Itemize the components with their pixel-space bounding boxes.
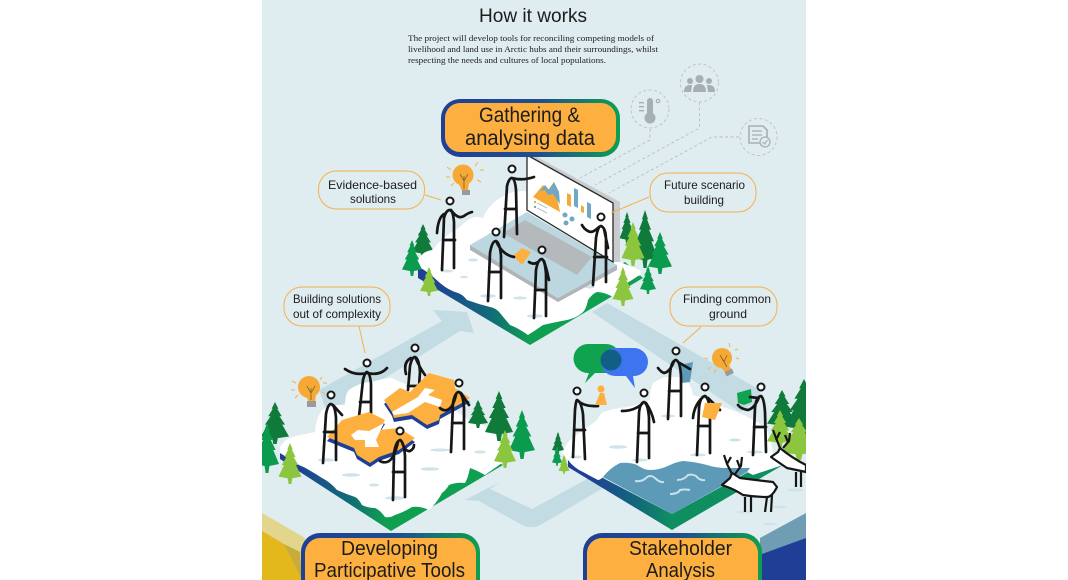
callout: building solutions [284, 287, 390, 353]
intro text: The project will develop tools for reconciling competing models of [408, 33, 654, 43]
person: rear left [405, 344, 425, 390]
trees behind top platform [412, 210, 672, 294]
snow patches: left [318, 448, 486, 500]
icon: lightbulb right [705, 343, 739, 376]
icon: lightbulb top [446, 162, 484, 195]
person: holding map [658, 348, 693, 419]
corner decoration: yellow [262, 513, 305, 580]
arrow: data to stakeholders [592, 303, 760, 412]
person: arms out [345, 360, 387, 417]
water [603, 461, 750, 514]
person: puzzle front [380, 428, 414, 500]
callout: evidence-based solutions: Evidence-based [328, 178, 417, 192]
person: holding figure [573, 386, 607, 459]
icon: lightbulb left [291, 376, 327, 407]
bubble: developing participative tools: Developing [341, 538, 438, 560]
callout: building solutions: Building solutions [293, 292, 381, 306]
callout: future scenario building [611, 173, 756, 213]
bubble: developing participative tools [301, 533, 480, 580]
icon: thermometer [631, 90, 669, 128]
title: How it works [479, 6, 587, 27]
person: puzzle right [440, 380, 469, 452]
bubble: stakeholder analysis: Stakeholder [629, 538, 732, 560]
bubble: gathering and analysing data: Gathering & [479, 104, 580, 127]
intro text: respecting the needs and cultures of local populations. [408, 55, 606, 65]
snow patches: right [570, 414, 803, 525]
icon: people [680, 64, 718, 102]
platform: developing tools [280, 378, 503, 531]
corner decoration: blue [760, 513, 806, 580]
person: puzzle left [323, 392, 342, 463]
person: holding green card [737, 384, 766, 455]
puzzle piece: front [327, 412, 415, 467]
speech bubbles [574, 344, 648, 388]
icon: document [740, 118, 777, 156]
bubble: stakeholder analysis [583, 533, 762, 580]
presentation floor [470, 212, 617, 302]
callout: evidence-based solutions [318, 171, 441, 209]
presentation board [527, 152, 620, 262]
person: left of top platform [437, 198, 472, 270]
reindeer: back [771, 430, 806, 487]
intro text [408, 33, 659, 65]
platform: stakeholder analysis [562, 377, 783, 530]
platform: gathering data [418, 191, 643, 345]
person: right by board [582, 214, 608, 285]
dashed connectors [580, 102, 739, 193]
trees: stakeholder [552, 379, 824, 474]
intro text: livelihood and land use in Arctic hubs and their surroundings, whilst [408, 44, 659, 54]
person: holding paper right [693, 384, 722, 455]
reindeer: front [722, 455, 777, 512]
person: speaking [622, 390, 654, 462]
trees: left platform [255, 391, 535, 484]
bubble: gathering and analysing data: analysing data [465, 127, 595, 150]
callout: building solutions: out of complexity [293, 307, 381, 321]
bubble: gathering and analysing data [441, 99, 620, 157]
arrow: stakeholders to tools [465, 472, 610, 527]
puzzle piece: rear [384, 373, 470, 429]
person: pointing at board [504, 166, 534, 237]
callout: future scenario building: Future scenario [664, 178, 745, 192]
background panel [262, 0, 806, 580]
callout: finding common ground: ground [709, 307, 747, 321]
person: holding paper [488, 228, 531, 301]
trees: top platform front [402, 222, 644, 306]
callout: finding common ground: Finding common [683, 292, 771, 306]
callout: future scenario building: building [684, 193, 724, 207]
callout: evidence-based solutions: solutions [350, 192, 396, 206]
callout: finding common ground [670, 287, 777, 343]
person: small front [529, 246, 549, 318]
arrow: tools to data [319, 310, 474, 407]
snow patches: top [441, 258, 595, 318]
